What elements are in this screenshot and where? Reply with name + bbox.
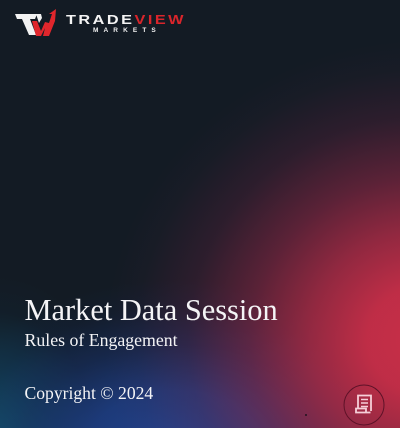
- title: Market Data Session: [24, 293, 278, 327]
- subtitle: Rules of Engagement: [24, 330, 178, 350]
- copyright: Copyright © 2024: [24, 383, 153, 403]
- logo: [15, 9, 186, 36]
- icon: logo mark: [15, 9, 56, 36]
- icon: document button: [344, 384, 384, 426]
- brand name: TRADEVIEW: [66, 12, 186, 26]
- brand subtitle: MARKETS: [93, 26, 161, 34]
- dot: [304, 414, 306, 416]
